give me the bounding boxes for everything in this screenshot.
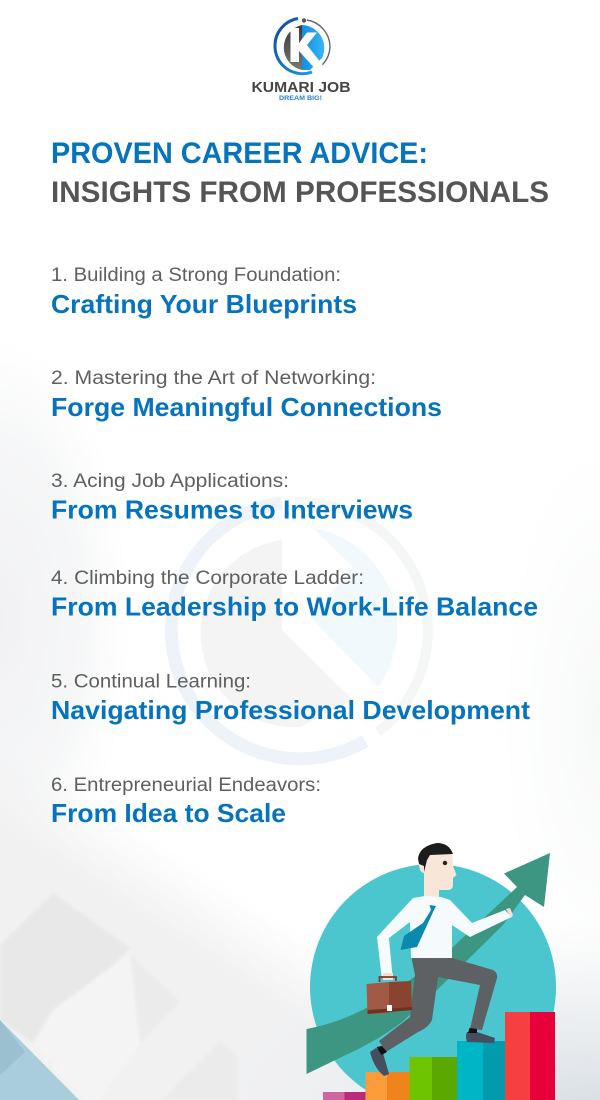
title: PROVEN CAREER ADVICE: [51,137,428,170]
man: shirt and arms [377,896,512,976]
man: trousers [379,958,497,1052]
illustration: climbing businessman [306,843,556,1100]
item 6: From Idea to Scale [51,798,286,828]
item 1: 1. Building a Strong Foundation: [51,265,341,286]
item 5: Navigating Professional Development [51,695,530,725]
item 4 [51,568,538,622]
item 5 [51,672,530,725]
item 2: Forge Meaningful Connections [51,392,442,422]
title [51,137,549,209]
bar: red [505,1012,555,1100]
bar: cyan [457,1041,505,1100]
teal circle [310,864,556,1100]
item 3: 3. Acing Job Applications: [51,471,289,492]
logo tagline: DREAM BIG! [279,96,322,102]
briefcase [366,977,412,1014]
watermark logo [171,502,428,759]
icon: blue corner triangle [0,1020,79,1100]
item 6 [51,775,321,828]
logo wordmark: KUMARI JOB [252,79,351,96]
bar: orange [366,1072,410,1100]
item 6: 6. Entrepreneurial Endeavors: [51,775,321,796]
man: shoes [370,1028,495,1076]
logo ring [275,18,312,74]
title: INSIGHTS FROM PROFESSIONALS [51,176,549,209]
item 3 [51,471,413,524]
item 3: From Resumes to Interviews [51,494,413,524]
bar: green [410,1057,457,1100]
item 5: 5. Continual Learning: [51,672,251,692]
man: tie [400,905,436,950]
growth arrow [306,853,550,1074]
item 2: 2. Mastering the Art of Networking: [51,368,376,389]
item 1 [51,265,357,319]
man: neck and head [418,843,456,897]
item 4: 4. Climbing the Corporate Ladder: [51,568,364,589]
man: hands [383,908,513,980]
logo [252,18,351,102]
item 2 [51,368,442,422]
item 1: Crafting Your Blueprints [51,289,357,319]
logo mark [284,25,302,70]
item 4: From Leadership to Work-Life Balance [51,592,538,622]
bar: pink [323,1092,366,1100]
